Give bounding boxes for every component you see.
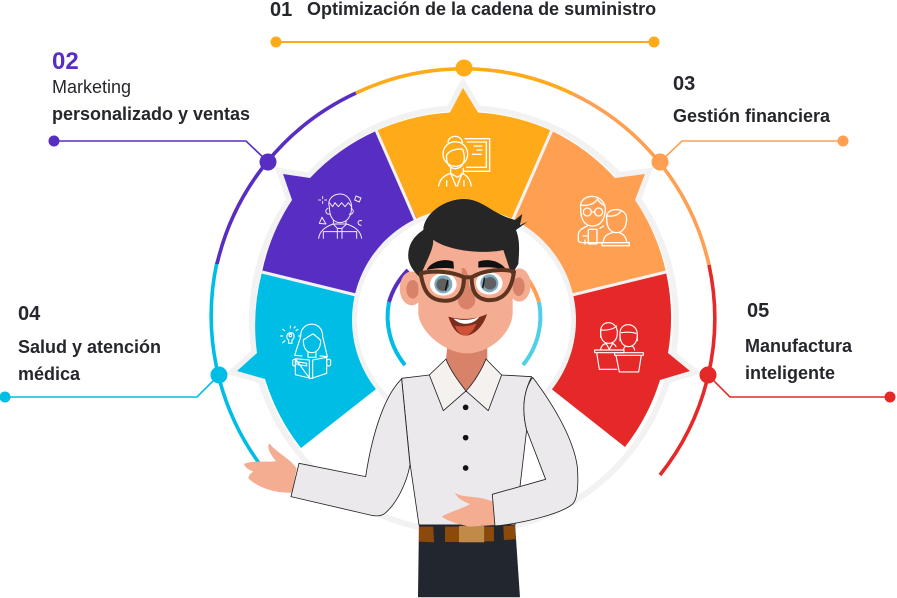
- hair: [408, 199, 528, 277]
- head: [400, 199, 531, 353]
- nose: [458, 268, 475, 309]
- label 02: 02: [52, 48, 79, 75]
- label 05: Manufactura: [745, 336, 853, 356]
- icon: teacher at board: [439, 136, 490, 186]
- label 05: [745, 300, 853, 383]
- shirt torso: [402, 375, 532, 525]
- collar: [429, 359, 502, 411]
- ears: [400, 268, 531, 305]
- glasses: [421, 270, 514, 301]
- segment: health: [237, 272, 464, 448]
- mouth: [448, 314, 487, 336]
- character: presenter: [244, 199, 578, 597]
- wheel centre hole: [352, 208, 576, 432]
- icon: girl reading with light bulb: [281, 324, 331, 378]
- label 02: personalizado y ventas: [52, 104, 250, 124]
- left arm: [291, 379, 410, 516]
- label 05: inteligente: [745, 363, 835, 383]
- label 04: [18, 303, 161, 384]
- segment separators: [262, 130, 666, 296]
- eyebrows: [427, 260, 507, 270]
- icon: student with letters: [319, 194, 362, 238]
- right hand: [442, 492, 495, 527]
- connector: 04: [0, 366, 228, 402]
- trousers: [418, 523, 520, 597]
- body: [244, 347, 578, 597]
- segment: finance: [464, 131, 666, 320]
- segment: manufacturing: [464, 272, 690, 447]
- label 02: [52, 48, 250, 124]
- label 04: Salud y atención: [18, 337, 161, 357]
- connector: 03: [652, 136, 848, 170]
- connector: 02: [48, 136, 276, 170]
- wheel backing ring: [237, 88, 690, 535]
- inner arc: [388, 270, 540, 365]
- outer arc: [211, 69, 715, 475]
- label 02: Marketing: [52, 77, 131, 97]
- neck: [429, 347, 502, 393]
- right arm: [492, 377, 578, 526]
- segment: marketing: [262, 131, 464, 320]
- face: [418, 240, 513, 353]
- label 03: 03: [673, 73, 695, 95]
- eyes: [430, 272, 503, 296]
- connector: 01: [270, 36, 660, 76]
- label 03: [673, 73, 831, 126]
- label 04: médica: [18, 364, 81, 384]
- connector: 05: [700, 366, 896, 402]
- left hand: [244, 443, 297, 493]
- label 04: 04: [18, 303, 41, 325]
- label 03: Gestión financiera: [673, 106, 831, 126]
- segment: supply chain: [376, 88, 552, 320]
- buttons: [463, 404, 468, 471]
- icon: colleagues with laptop: [578, 196, 629, 246]
- icon: two people at lecterns: [595, 323, 643, 372]
- label 05: 05: [747, 300, 769, 322]
- belt: [419, 525, 516, 542]
